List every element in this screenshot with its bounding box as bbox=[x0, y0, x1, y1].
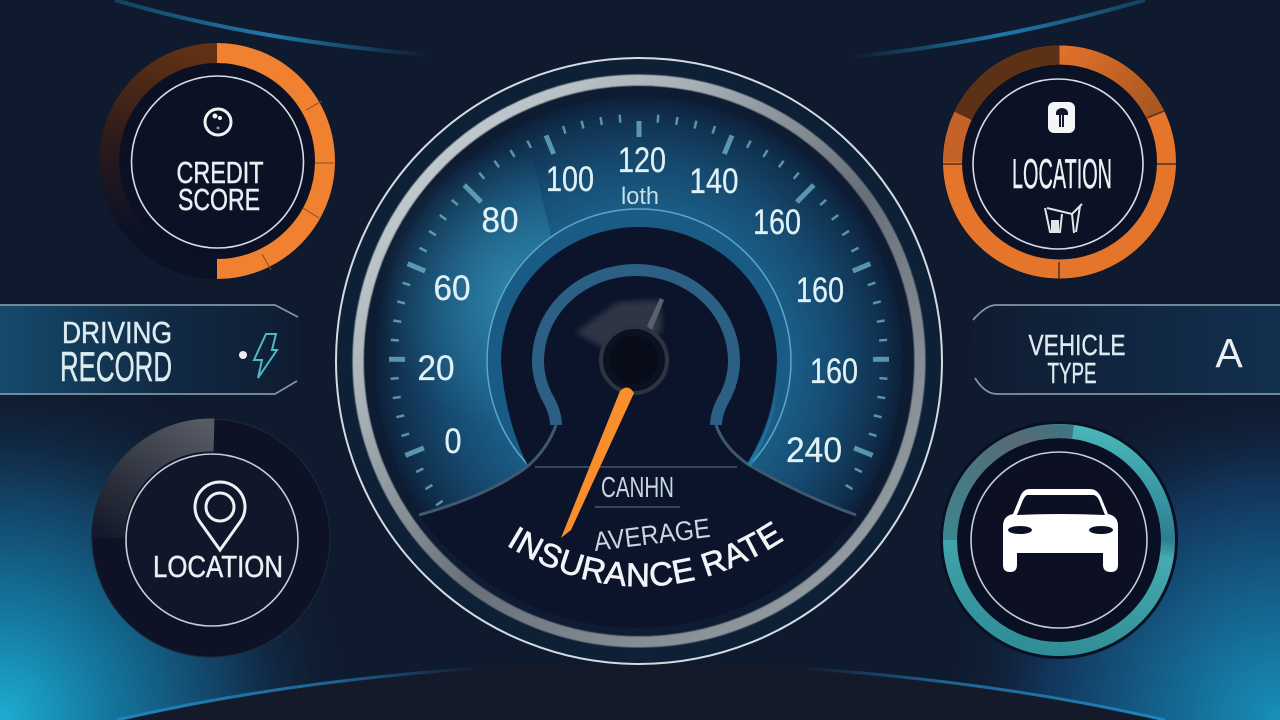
sublabel average: AVERAGE bbox=[592, 513, 712, 557]
speed scale numbers: 160 bbox=[810, 352, 858, 391]
icon: car bbox=[1003, 489, 1118, 572]
sublabel CANHN: CANHN bbox=[601, 472, 674, 504]
speed scale numbers bbox=[418, 141, 858, 470]
gauge face bbox=[353, 97, 903, 625]
tick marks bbox=[389, 115, 889, 505]
vehicle type label: VEHICLE bbox=[1028, 330, 1126, 362]
speed scale numbers: 0 bbox=[444, 422, 462, 461]
speed scale numbers: 140 bbox=[690, 162, 738, 201]
panel: location dial upper right bbox=[942, 45, 1176, 279]
location segmented ring bbox=[943, 55, 1176, 279]
speed unit: loth bbox=[621, 183, 659, 210]
icon: top badge bbox=[1048, 102, 1075, 133]
vehicle type label bbox=[1028, 330, 1126, 390]
driving record label: RECORD bbox=[60, 343, 172, 390]
gauge hub bbox=[576, 298, 667, 393]
panel: driving record banner bbox=[0, 305, 300, 394]
credit score label: CREDIT bbox=[176, 155, 264, 190]
vehicle grade letter: A bbox=[1215, 330, 1243, 376]
panel: location dial lower left bbox=[92, 419, 330, 657]
speed scale numbers: 80 bbox=[482, 201, 518, 240]
needle bbox=[561, 387, 634, 538]
speed scale numbers: 60 bbox=[434, 269, 470, 308]
chart: central speedometer gauge bbox=[335, 57, 943, 665]
speed scale numbers: 120 bbox=[618, 141, 666, 180]
speed scale numbers: 240 bbox=[786, 431, 842, 470]
dark centre and lower panel bbox=[419, 227, 856, 628]
icon: lightning bolt bbox=[239, 334, 277, 378]
location label: LOCATION bbox=[153, 549, 283, 584]
speed scale numbers: 160 bbox=[753, 203, 801, 242]
panel: vehicle dial bbox=[940, 421, 1178, 659]
icon: credit gauge bbox=[205, 109, 231, 135]
panel: credit score dial bbox=[99, 43, 335, 279]
location progress ring bbox=[108, 435, 214, 538]
speed scale numbers: 20 bbox=[418, 349, 454, 388]
icon: bottom glyph bbox=[1045, 204, 1082, 233]
vehicle type label: TYPE bbox=[1048, 358, 1096, 390]
credit score label bbox=[176, 155, 264, 217]
speed scale numbers: 160 bbox=[796, 271, 844, 310]
speed scale numbers: 100 bbox=[546, 160, 594, 199]
icon: map pin bbox=[195, 482, 245, 550]
driving record label bbox=[60, 315, 172, 390]
panel: location dial upper right: LOCATION bbox=[1012, 150, 1112, 197]
vehicle progress ring bbox=[950, 431, 1168, 649]
panel: vehicle type banner bbox=[973, 305, 1280, 394]
driving record label: DRIVING bbox=[62, 315, 172, 350]
title: insurance rate: INSURANCE RATE bbox=[508, 521, 784, 587]
credit score label: SCORE bbox=[178, 182, 260, 217]
credit score progress ring bbox=[109, 53, 334, 270]
